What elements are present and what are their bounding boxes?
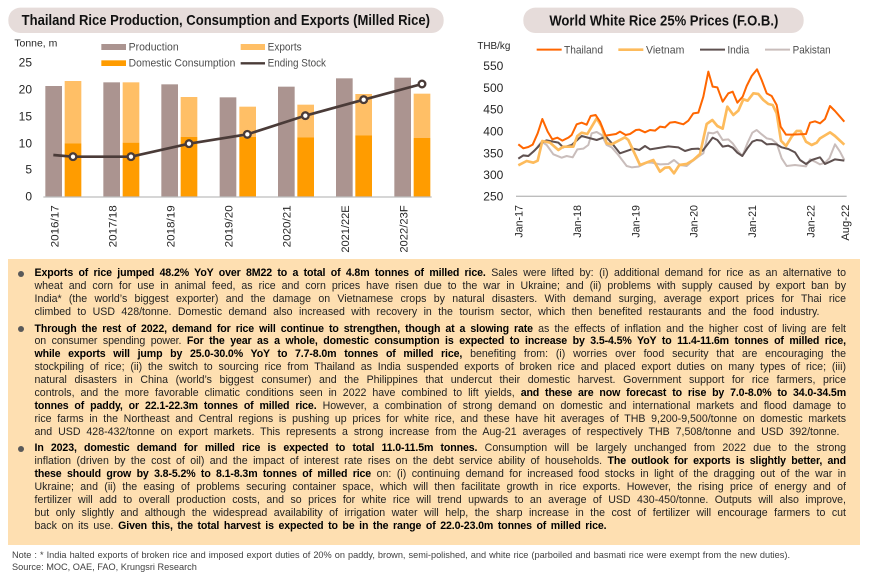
y axis labels: 400 xyxy=(483,124,504,138)
x axis labels: 2022/23F xyxy=(398,205,410,253)
text block: outlook 2023: back on its use. Given this, the total harvest is expected to be in the range of 22.0-23.0m tonnes of milled rice. xyxy=(34,520,606,532)
line: Thailand xyxy=(518,69,844,148)
legend: India xyxy=(727,44,749,56)
panel: commentary text xyxy=(8,259,860,545)
domestic consumption bars xyxy=(65,135,430,197)
y axis labels: 10 xyxy=(19,136,32,150)
ending stock line xyxy=(53,81,425,160)
x axis labels: 2021/22E xyxy=(340,205,352,253)
heading: world prices xyxy=(523,8,804,33)
footnote: Note : * India halted exports of broken rice and imposed export duties of 20% on paddy, brown, semi-polished, and white rice (parboiled and basmati rice were exempt from the new duties). xyxy=(12,550,790,560)
y axis labels: 300 xyxy=(483,168,504,182)
text block: exports: India* (the world’s biggest exporter) and the damage on Vietnamese crops by natural disasters. With demand surging, average export prices for Thai rice xyxy=(34,293,846,305)
legend: Thailand xyxy=(564,44,603,56)
panel: rice production chart xyxy=(8,8,444,253)
production bars xyxy=(45,78,411,197)
text block: outlook 2023: fertilizer will add to overall production costs, and so prices for white rice will trend upwards to an average of USD 430-450/tonne. Outputs will also improve, xyxy=(34,494,846,506)
y axis labels: 350 xyxy=(483,146,504,160)
text block: rest of 2022: while exports will jump by 25.0-30.0% YoY to 7.7-8.0m tonnes of milled rice, benefiting from: (i) worries over food security that are encouraging the xyxy=(34,348,846,360)
y axis labels: 15 xyxy=(19,109,32,123)
x axis labels: 2018/19 xyxy=(165,205,177,247)
x axis labels xyxy=(514,205,852,241)
heading: rice production xyxy=(8,8,444,33)
y axis labels: 250 xyxy=(483,190,504,204)
text block: exports: Exports of rice jumped 48.2% YoY over 8M22 to a total of 4.8m tonnes of milled rice. Sales were lifted by: (i) additional demand for rice as an alternative to xyxy=(34,267,846,279)
line: Vietnam xyxy=(518,93,844,173)
legend: Production xyxy=(129,41,179,53)
text block: exports xyxy=(18,267,846,318)
legend: Ending Stock xyxy=(268,58,327,70)
axis unit label: THB/kg xyxy=(477,41,510,52)
text block: outlook 2023: In 2023, domestic demand for milled rice is expected to total 11.0-11.5m tonnes. Consumption will be largely unchanged from 2022 due to the strong xyxy=(34,442,846,454)
x axis labels xyxy=(49,205,410,253)
text block: rest of 2022: tonnes of paddy, or 22.1-22.3m tonnes of milled rice. However, a combination of strong demand on domestic and international markets and flood damage to xyxy=(34,400,846,412)
text block: outlook 2023: but only slightly and although the widespread availability of irrigation water will help, the sharp increase in the cost of fertilizer will encourage farmers to cut xyxy=(34,507,846,519)
legend: Vietnam xyxy=(646,44,684,56)
x axis labels: Jan-21 xyxy=(747,205,759,238)
source line: Source: MOC, OAE, FAO, Krungsri Research xyxy=(12,562,197,572)
text block: rest of 2022: on consumer spending power. For the year as a whole, domestic consumption is expected to increase by 3.5-4.5% YoY to 11.4-11.6m tonnes of milled rice, xyxy=(34,335,846,347)
x axis labels: Jan-22 xyxy=(805,205,817,238)
text block: rest of 2022: controls, and the more favorable climatic conditions seen in 2022 have combined to lift yields, and these are now forecast to rise by 7.0-8.0% to 34.0-34.5m xyxy=(34,387,846,399)
x axis labels: Jan-19 xyxy=(630,205,642,238)
x axis labels: 2017/18 xyxy=(107,205,119,247)
x axis labels: Jan-20 xyxy=(689,205,701,238)
x axis labels: 2019/20 xyxy=(223,205,235,247)
legend xyxy=(537,44,831,56)
panel: world rice prices chart xyxy=(477,8,852,241)
text block: outlook 2023 xyxy=(18,442,846,532)
text block: outlook 2023: inflation (driven by the cost of oil) and the impact of interest rate rises on the debt service ability of households. The outlook for exports is slightly better, and xyxy=(34,455,846,467)
x axis labels: 2016/17 xyxy=(49,205,61,247)
legend: Domestic Consumption xyxy=(129,58,235,70)
line: India xyxy=(518,136,844,164)
text block: rest of 2022: and USD 428-432/tonne on export markets. This represents a strong increase from the Aug-21 averages of respectively THB 7,508/tonne and USD 392/tonne. xyxy=(34,426,840,438)
x axis labels: Aug-22 xyxy=(840,205,852,241)
legend: Pakistan xyxy=(793,44,831,56)
text block: outlook 2023: Ukraine; and (ii) the easing of problems securing container space, which will then facilitate growth in rice exports. However, the rising price of energy and of xyxy=(34,481,846,493)
text block: rest of 2022: natural disasters in China (world’s biggest consumer) and the Philippines that undercut their domestic harvest. Government support for rice farmers, price xyxy=(34,374,846,386)
y axis labels: 20 xyxy=(19,83,32,97)
exports bars xyxy=(65,81,430,143)
y axis labels: 450 xyxy=(483,103,504,117)
x axis labels: 2020/21 xyxy=(282,205,294,247)
text block: rest of 2022: rice farms in the Northeast and Central regions is pushing up prices for white rice, and these have hit averages of THB 9,200-9,500/tonne on domestic markets xyxy=(34,413,846,425)
legend xyxy=(101,41,327,70)
text block: exports: wheat and corn for use in animal feed, as rice and corn prices have risen due to the war in Ukraine; and (ii) problems with supply caused by export ban by xyxy=(34,280,846,292)
x axis labels: Jan-18 xyxy=(572,205,584,238)
heading: world prices: World White Rice 25% Prices (F.O.B.) xyxy=(549,13,779,29)
text block: outlook 2023: these should grow by 3.8-5.2% to 8.1-8.3m tonnes of milled rice on: (i) continuing demand for increased food stocks in light of the dragging out of the war in xyxy=(34,468,846,480)
text block: rest of 2022: stockpiling of rice; (ii) the switch to sourcing rice from Thailand as India suspended exports of broken rice and placed export duties on many types of rice; (iii) xyxy=(34,361,846,373)
y axis labels: 25 xyxy=(19,56,32,70)
y axis labels: 550 xyxy=(483,59,504,73)
y axis labels: 500 xyxy=(483,81,504,95)
text block: rest of 2022 xyxy=(18,322,846,438)
legend: Exports xyxy=(268,41,302,53)
line: Pakistan xyxy=(518,130,844,167)
y axis labels: 0 xyxy=(25,190,32,204)
text block: exports: climbed to USD 428/tonne. Domestic demand also increased with recovery in the tourism sector, which then benefited restaurants and the food industry. xyxy=(34,306,820,318)
axis unit label: Tonne, m xyxy=(14,38,57,49)
y axis labels: 5 xyxy=(25,163,32,177)
text block: rest of 2022: Through the rest of 2022, demand for rice will continue to strengthen, though at a slowing rate as the effects of inflation and the higher cost of living are felt xyxy=(34,322,846,334)
x axis labels: Jan-17 xyxy=(514,205,526,238)
y axis labels xyxy=(19,56,32,204)
y axis labels xyxy=(483,59,504,204)
